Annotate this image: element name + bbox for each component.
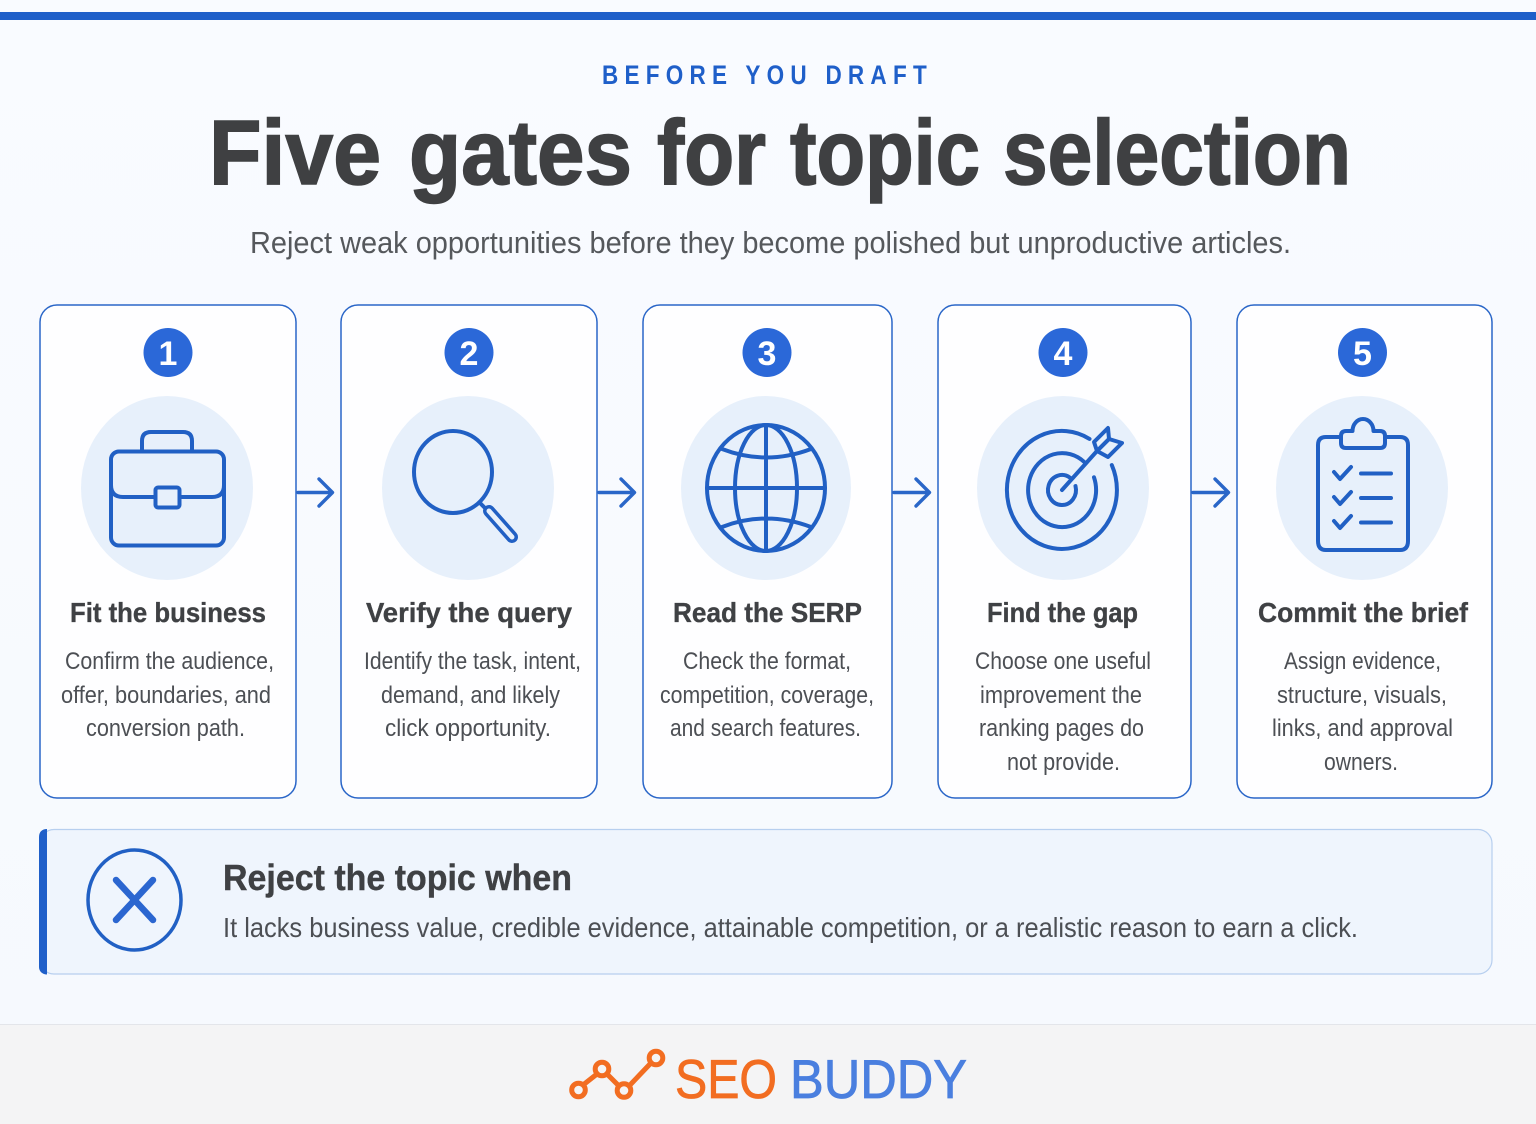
heading: find the gap: Find the gap — [987, 597, 1138, 628]
body text: Identify the task, intent, — [364, 648, 581, 675]
title: selection — [1003, 102, 1351, 204]
body text: Choose one useful — [975, 648, 1151, 675]
number badge 1 — [144, 328, 192, 377]
panel: gate 2 verify the query — [341, 305, 597, 798]
panel: gate 5 commit the brief — [1237, 305, 1492, 798]
title: for — [657, 102, 766, 204]
body text: offer, boundaries, and — [61, 682, 271, 709]
body text: ranking pages do — [979, 715, 1144, 742]
arrow 1 to 2 — [298, 479, 332, 506]
body text — [364, 648, 581, 742]
body text: links, and approval — [1272, 715, 1453, 742]
icon: magnifying glass — [382, 396, 554, 580]
callout body: It lacks business value, credible evidence, attainable competition, or a realistic reason to earn a click. — [223, 912, 1358, 943]
icon: briefcase — [81, 396, 253, 580]
panel: gate 1 fit the business — [40, 305, 296, 798]
number badge 5 — [1338, 328, 1387, 377]
body text: Confirm the audience, — [65, 648, 274, 675]
body text: Check the format, — [683, 648, 851, 675]
title: gates — [409, 102, 632, 204]
body text: conversion path. — [86, 715, 245, 742]
body text — [1272, 648, 1453, 776]
subtitle: Reject weak opportunities before they become polished but unproductive articles. — [250, 225, 1291, 260]
number badge 3: 3 — [758, 335, 776, 373]
callout: reject the topic — [39, 829, 1492, 974]
logo wordmark: BUDDY — [790, 1048, 967, 1110]
title: topic — [790, 102, 980, 204]
number badge 4: 4 — [1054, 335, 1073, 373]
number badge 3 — [742, 328, 792, 377]
top accent bar — [0, 12, 1536, 20]
number badge 1: 1 — [159, 335, 177, 373]
footer — [0, 1024, 1536, 1124]
heading: commit the brief: Commit the brief — [1258, 597, 1469, 628]
body text: structure, visuals, — [1277, 682, 1447, 709]
body text: and search features. — [670, 715, 861, 742]
eyebrow: BEFORE YOU DRAFT — [602, 61, 927, 90]
body text: not provide. — [1007, 749, 1120, 776]
title: Five — [209, 102, 381, 204]
callout accent bar — [39, 829, 47, 974]
logo wordmark: SEO — [675, 1048, 777, 1110]
icon: target with arrow — [977, 396, 1149, 580]
body text — [61, 648, 274, 742]
heading: read the SERP: Read the SERP — [673, 597, 862, 628]
icon: x in circle — [88, 850, 181, 950]
body text: competition, coverage, — [660, 682, 874, 709]
number badge 2: 2 — [460, 335, 478, 373]
body text: improvement the — [980, 682, 1142, 709]
panel: gate 4 find the gap — [938, 305, 1191, 798]
logo wordmark — [675, 1048, 967, 1110]
arrow 2 to 3 — [599, 479, 634, 506]
number badge 2 — [444, 328, 494, 377]
icon: clipboard checklist — [1276, 396, 1448, 580]
callout heading: Reject the topic when — [223, 857, 572, 898]
arrow 3 to 4 — [894, 479, 930, 506]
body text: demand, and likely — [381, 682, 560, 709]
panel: gate 3 read the SERP — [643, 305, 892, 798]
body text: owners. — [1324, 749, 1398, 776]
body text — [975, 648, 1151, 776]
arrow 4 to 5 — [1193, 479, 1228, 506]
number badge 4 — [1038, 328, 1088, 377]
body text: click opportunity. — [385, 715, 551, 742]
number badge 5: 5 — [1353, 335, 1372, 373]
logo mark: trend line — [572, 1051, 663, 1097]
body text — [660, 648, 874, 742]
icon: globe — [681, 396, 851, 580]
body text: Assign evidence, — [1284, 648, 1441, 675]
heading: verify the query: Verify the query — [366, 597, 572, 628]
heading: fit the business: Fit the business — [70, 597, 266, 628]
title — [209, 102, 1351, 204]
